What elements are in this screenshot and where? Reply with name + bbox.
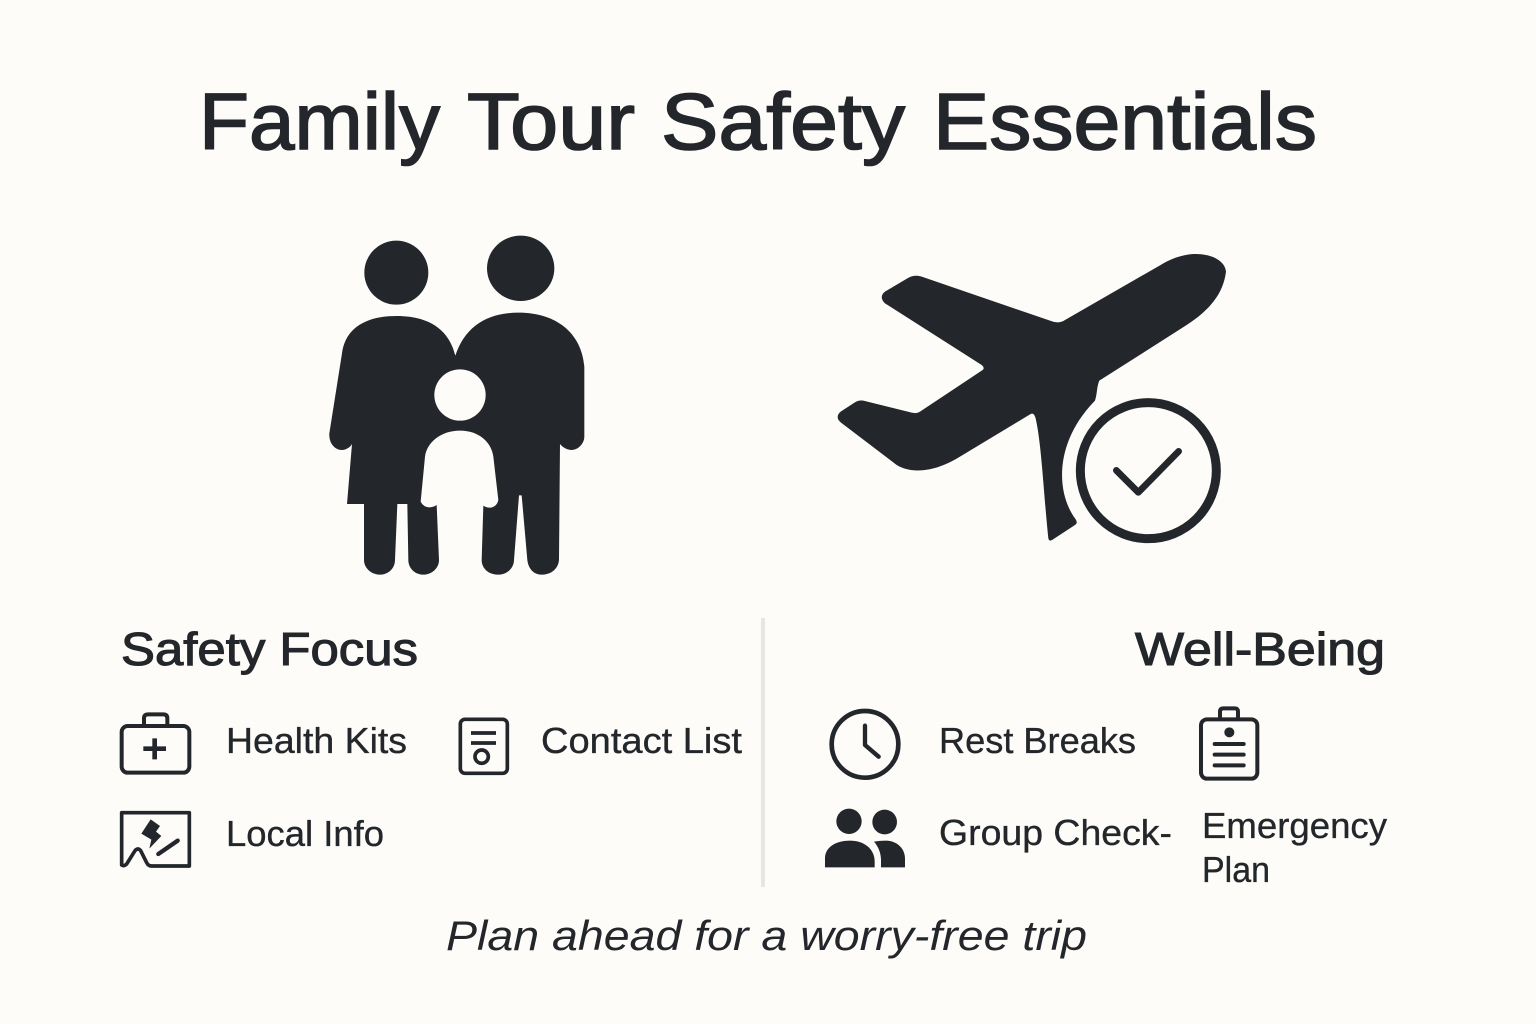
icon: group (825, 809, 905, 867)
icon: airplane with check badge (838, 254, 1226, 541)
label: local info: Local Info (226, 813, 384, 854)
icon: health kit (122, 714, 189, 773)
label: health kits: Health Kits (226, 720, 407, 761)
panel: well-being (825, 623, 1387, 890)
title: Family (199, 77, 440, 166)
panel: safety focus (121, 623, 742, 866)
label: rest breaks: Rest Breaks (939, 720, 1136, 761)
title (199, 77, 1317, 166)
icon: local info map (122, 813, 189, 866)
icon: clock (832, 711, 898, 778)
heading: well-being: Well-Being (1135, 623, 1385, 675)
label: emergency plan (1202, 805, 1387, 890)
tagline: Plan ahead for a worry-free trip (446, 912, 1087, 959)
icon: family (329, 236, 584, 575)
icon: clipboard (1201, 708, 1257, 779)
icon: contact list (460, 719, 507, 773)
label: emergency plan: Plan (1202, 849, 1270, 890)
label: contact list: Contact List (541, 720, 742, 761)
label: emergency plan: Emergency (1202, 805, 1387, 846)
title: Tour (467, 77, 635, 166)
title: Safety (661, 77, 905, 166)
divider (761, 618, 765, 887)
heading: safety focus: Safety Focus (121, 623, 418, 675)
title: Essentials (933, 77, 1317, 166)
label: group check: Group Check- (939, 812, 1172, 853)
